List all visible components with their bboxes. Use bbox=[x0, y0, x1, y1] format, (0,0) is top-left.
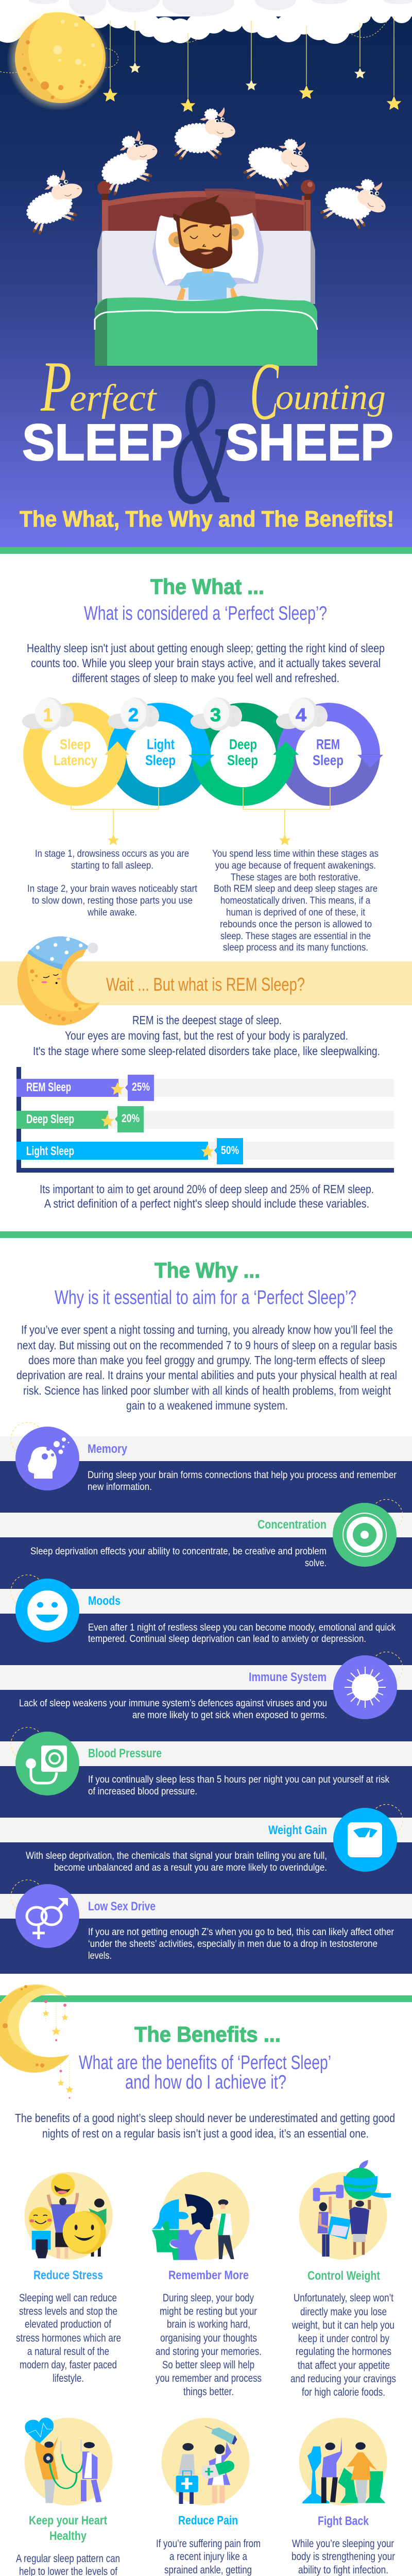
row: concentration bbox=[30, 1503, 397, 1569]
benefit: reduce stress: modern day, faster paced bbox=[20, 2359, 117, 2371]
row: memory bbox=[15, 1427, 397, 1493]
benefit: reduce pain: a recent injury like a bbox=[169, 2551, 247, 2563]
benefit: remember more: organising your thoughts bbox=[160, 2332, 257, 2344]
benefit: remember more: brain is working hard, bbox=[167, 2318, 250, 2330]
stages left text bbox=[27, 848, 198, 918]
intro text bbox=[16, 1323, 397, 1412]
bed bbox=[95, 180, 317, 366]
stages diagram bbox=[22, 698, 383, 845]
benefit: reduce pain bbox=[156, 2418, 261, 2576]
row: moods: tempered. Continual sleep deprivation can lead to anxiety or depression. bbox=[88, 1633, 366, 1645]
intro text bbox=[15, 2111, 395, 2140]
title: P bbox=[40, 347, 72, 427]
row: weight gain: Weight Gain bbox=[268, 1823, 327, 1837]
row: immune system: Immune System bbox=[249, 1670, 327, 1684]
benefit: reduce pain: Reduce Pain bbox=[178, 2514, 238, 2528]
illustration: medical bbox=[162, 2418, 249, 2505]
benefit: control weight: directly make you lose bbox=[300, 2306, 387, 2318]
benefit: control weight bbox=[290, 2160, 396, 2398]
clouds: top bbox=[0, 0, 412, 44]
row: low sex drive: ‘under the sheets’ activities, especially in men due to a drop in testosterone bbox=[88, 1938, 377, 1950]
section: the why bbox=[16, 1258, 397, 1412]
benefit: reduce stress: Sleeping well can reduce bbox=[19, 2292, 117, 2304]
title: C bbox=[250, 345, 279, 437]
row: weight gain: become unbalanced and as a result you are more likely to overindulge. bbox=[54, 1862, 327, 1873]
icon: moon with nightcap bbox=[18, 936, 99, 1025]
benefit: control weight: for high calorie foods. bbox=[302, 2386, 385, 2398]
bar: rem sleep bbox=[16, 1075, 154, 1101]
stages left text: to slow down, resting those parts you use bbox=[32, 895, 193, 906]
row: moods: Moods bbox=[88, 1594, 121, 1608]
row: low sex drive: levels. bbox=[88, 1950, 112, 1961]
benefit: reduce pain: sprained ankle, getting bbox=[164, 2564, 252, 2576]
benefit: reduce stress: Reduce Stress bbox=[33, 2268, 103, 2282]
icon: scale bbox=[333, 1808, 397, 1872]
stages diagram: Latency bbox=[54, 752, 97, 768]
icon: smile bbox=[15, 1579, 79, 1642]
row: low sex drive bbox=[15, 1884, 394, 1961]
stages right text: homeostatically driven. This means, if a bbox=[220, 895, 370, 906]
benefit: fight back: Fight Back bbox=[318, 2514, 369, 2528]
benefit: remember more: During sleep, your body bbox=[163, 2292, 254, 2304]
benefit: control weight: that affect your appetite bbox=[298, 2360, 390, 2371]
row: concentration: Concentration bbox=[258, 1518, 327, 1532]
benefit: remember more: Remember More bbox=[168, 2268, 249, 2282]
stages right text: sleep process and its many functions. bbox=[223, 942, 368, 953]
title bbox=[20, 337, 394, 543]
benefit: control weight: regulating the hormones bbox=[296, 2346, 391, 2358]
benefit: heart healthy: A regular sleep pattern can bbox=[16, 2553, 120, 2565]
stages right text: rebounds once the person is allowed to bbox=[220, 919, 372, 930]
rem text: REM is the deepest stage of sleep. bbox=[132, 1013, 282, 1027]
title: & bbox=[170, 337, 235, 543]
bar: deep sleep: Deep Sleep bbox=[26, 1112, 74, 1126]
row: concentration: solve. bbox=[305, 1557, 327, 1569]
subheading: and how do I achieve it? bbox=[125, 2072, 286, 2093]
ears bbox=[168, 232, 184, 247]
bar: deep sleep: 20% bbox=[122, 1112, 140, 1125]
stages right text: You spend less time within these stages as bbox=[212, 848, 379, 859]
benefit: control weight: keep it under control by bbox=[298, 2333, 389, 2345]
stages diagram: 1 bbox=[43, 704, 53, 725]
icon: virus bbox=[333, 1655, 397, 1719]
benefit: fight back bbox=[290, 2418, 396, 2576]
heading: The Why ... bbox=[154, 1258, 260, 1282]
stages left text: starting to fall asleep. bbox=[71, 860, 153, 871]
mattress bbox=[97, 231, 315, 304]
blanket bbox=[95, 296, 317, 366]
benefit: reduce stress: lifestyle. bbox=[53, 2372, 84, 2384]
hanging stars bbox=[103, 16, 401, 112]
heading: The Benefits ... bbox=[134, 2022, 281, 2046]
benefit: heart healthy: Healthy bbox=[49, 2529, 87, 2543]
section: the what bbox=[22, 574, 385, 953]
stages left text: while awake. bbox=[87, 907, 137, 918]
heading: The What ... bbox=[150, 574, 264, 599]
stages diagram: Sleep bbox=[313, 752, 344, 768]
bar: rem sleep: 25% bbox=[132, 1080, 150, 1093]
icon: gender symbols bbox=[15, 1884, 79, 1948]
benefit: remember more: and storing your memories. bbox=[156, 2346, 262, 2358]
bar: light sleep: Light Sleep bbox=[26, 1144, 74, 1158]
row backgrounds bbox=[0, 1436, 412, 1974]
stages right text bbox=[212, 848, 379, 953]
dashed arcs on rows bbox=[11, 1422, 403, 1908]
shirt and arms bbox=[179, 271, 237, 300]
row: concentration: Sleep deprivation effects your ability to concentrate, be creative and problem bbox=[30, 1546, 327, 1557]
illustration: remember more bbox=[152, 2172, 249, 2260]
benefit: reduce pain: If you’re suffering pain from bbox=[156, 2538, 261, 2550]
benefit: remember more bbox=[152, 2172, 262, 2398]
stages left text: In stage 2, your brain waves noticeably start bbox=[27, 883, 198, 894]
stages diagram: Deep bbox=[229, 736, 257, 752]
subheading: What are the benefits of ‘Perfect Sleep’ bbox=[79, 2052, 331, 2074]
row: immune system: are more likely to get sick when exposed to germs. bbox=[132, 1709, 327, 1721]
benefit: reduce stress bbox=[16, 2172, 121, 2384]
row: memory: Memory bbox=[88, 1442, 128, 1456]
section: the benefits bbox=[15, 2022, 395, 2140]
icon: target bbox=[333, 1503, 397, 1567]
row: immune system bbox=[19, 1655, 397, 1721]
intro text: different stages of sleep to make you feel well and refreshed. bbox=[72, 671, 339, 685]
benefit: reduce stress: stress hormones which are bbox=[16, 2332, 121, 2344]
row: moods bbox=[15, 1579, 396, 1645]
stages diagram: Sleep bbox=[227, 752, 258, 768]
row: blood pressure: of increased blood pressure. bbox=[88, 1786, 197, 1797]
chart note bbox=[40, 1182, 374, 1210]
intro text bbox=[27, 641, 385, 685]
bar: deep sleep bbox=[16, 1106, 144, 1132]
title: erfect bbox=[70, 377, 158, 419]
stages right text: sleep. These stages are essential in the bbox=[220, 930, 371, 942]
stages right text: These stages are both restorative. bbox=[231, 872, 360, 883]
icon: blood pressure monitor bbox=[15, 1732, 79, 1795]
stages diagram: 3 bbox=[210, 704, 221, 725]
stages diagram: Sleep bbox=[60, 736, 91, 752]
row: blood pressure: Blood Pressure bbox=[88, 1747, 162, 1760]
row: weight gain: With sleep deprivation, the chemicals that signal your brain telling you are full, bbox=[26, 1850, 327, 1861]
row: low sex drive: Low Sex Drive bbox=[88, 1900, 156, 1913]
title: SLEEP bbox=[22, 414, 183, 471]
title: SHEEP bbox=[226, 414, 393, 471]
bar: light sleep: 50% bbox=[221, 1144, 239, 1157]
rem callout band: Wait ... But what is REM Sleep? bbox=[106, 974, 305, 995]
bar: light sleep bbox=[16, 1138, 243, 1164]
row: blood pressure bbox=[15, 1732, 389, 1797]
benefit: heart healthy bbox=[14, 2418, 122, 2576]
subheading: What is considered a ‘Perfect Sleep’? bbox=[84, 603, 327, 624]
icon: brain head bbox=[15, 1427, 79, 1490]
moon bbox=[7, 8, 110, 111]
head and beard bbox=[173, 195, 232, 269]
benefit: remember more: So better sleep will help bbox=[162, 2359, 254, 2371]
icon: crescent moon with hanging stars bbox=[0, 1984, 74, 2099]
stages diagram: 2 bbox=[128, 704, 139, 725]
benefit: control weight: Control Weight bbox=[307, 2269, 380, 2283]
stages left text: In stage 1, drowsiness occurs as you are bbox=[35, 848, 189, 859]
rem callout band bbox=[0, 936, 412, 1025]
illustration: control weight bbox=[299, 2160, 391, 2260]
stages right text: you age because of frequent awakenings. bbox=[215, 860, 376, 871]
benefit: reduce stress: stress levels and stop the bbox=[19, 2306, 117, 2317]
illustration: reduce stress bbox=[25, 2172, 112, 2260]
stages diagram: Light bbox=[147, 736, 175, 752]
stages right text: human is deprived of one of these, it bbox=[226, 907, 365, 918]
bar: rem sleep: REM Sleep bbox=[26, 1080, 71, 1094]
illustration: chess bbox=[299, 2418, 387, 2505]
bar chart bbox=[16, 1067, 394, 1173]
rem text bbox=[33, 1013, 380, 1058]
benefit: reduce stress: a natural result of the bbox=[27, 2346, 109, 2358]
stages diagram: 4 bbox=[296, 704, 306, 725]
row: weight gain bbox=[26, 1808, 397, 1873]
stages diagram: REM bbox=[316, 736, 340, 752]
title: ounting bbox=[276, 378, 386, 417]
subheading bbox=[79, 2052, 331, 2093]
illustration: heart bbox=[25, 2418, 112, 2505]
rem text: Your eyes are moving fast, but the rest of your body is paralyzed. bbox=[65, 1029, 348, 1042]
row: immune system: Lack of sleep weakens your immune system’s defences against viruses and you bbox=[19, 1698, 327, 1709]
stages right text: Both REM sleep and deep sleep stages are bbox=[214, 883, 377, 894]
stages diagram: Sleep bbox=[145, 752, 176, 768]
pillow bbox=[152, 213, 264, 286]
benefit: reduce stress: elevated production of bbox=[25, 2318, 111, 2330]
benefit: remember more: things better. bbox=[183, 2386, 234, 2398]
intro text: gain to a weakened immune system. bbox=[126, 1399, 288, 1412]
benefit: remember more: you remember and process bbox=[156, 2372, 262, 2384]
benefit: remember more: might be resting but your bbox=[160, 2306, 257, 2317]
hero background bbox=[0, 0, 412, 547]
benefit: fight back: ability to fight infection. bbox=[298, 2564, 388, 2576]
dashed decorative arcs bbox=[0, 16, 390, 97]
sheep bbox=[18, 107, 394, 235]
headboard bbox=[97, 180, 315, 234]
row: memory: new information. bbox=[88, 1481, 152, 1493]
benefit: heart healthy: Keep your Heart bbox=[29, 2514, 107, 2528]
